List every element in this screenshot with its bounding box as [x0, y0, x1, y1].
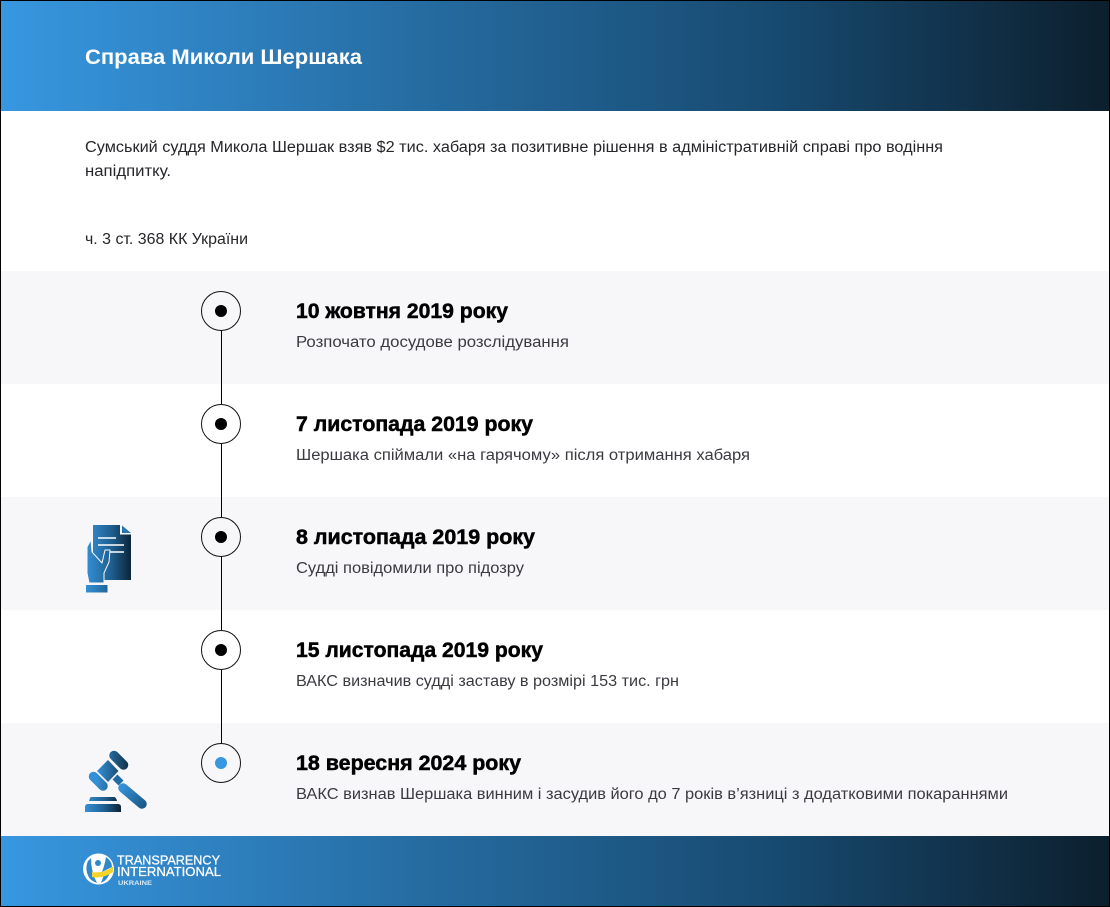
- logo: Transparency International Ukraine: INTERNATIONAL: [117, 865, 221, 879]
- timeline event 4: ВАКС визначив судді заставу в розмірі 153 тис. грн: [296, 673, 679, 690]
- icon: judge gavel: [85, 756, 142, 812]
- timeline event 3: 8 листопада 2019 року: [296, 526, 535, 549]
- footer banner: [1, 836, 1109, 906]
- icon: hand holding document: [86, 525, 131, 592]
- timeline event 2: Шершака спіймали «на гарячому» після отримання хабаря: [296, 447, 750, 464]
- logo: Transparency International Ukraine: TRANSPARENCY: [117, 854, 221, 868]
- intro text: [85, 139, 943, 180]
- legal article: ч. 3 ст. 368 КК України: [85, 231, 248, 248]
- timeline event 4: 15 листопада 2019 року: [296, 639, 543, 662]
- timeline event 1: 10 жовтня 2019 року: [296, 300, 508, 323]
- timeline event 1: [202, 292, 569, 351]
- timeline connector line: [220, 311, 222, 763]
- intro text: напідпитку.: [85, 163, 171, 180]
- header banner: [1, 1, 1109, 111]
- timeline event 3: [202, 518, 535, 577]
- timeline event 2: [202, 404, 750, 464]
- logo: Transparency International Ukraine: [83, 854, 221, 887]
- timeline event 5: 18 вересня 2024 року: [296, 752, 521, 775]
- timeline event 1: Розпочато досудове розслідування: [296, 334, 569, 351]
- timeline event 5: [202, 744, 1008, 803]
- intro text: Сумський суддя Микола Шершак взяв $2 тис. хабаря за позитивне рішення в адміністративній справі про водіння: [85, 139, 943, 156]
- title: Справа Миколи Шершака: [85, 46, 362, 69]
- timeline event 3: Судді повідомили про підозру: [296, 560, 524, 577]
- timeline event 5: ВАКС визнав Шершака винним і засудив його до 7 років в’язниці з додатковими покараннями: [296, 786, 1008, 803]
- row backgrounds: [1, 271, 1109, 836]
- timeline event 2: 7 листопада 2019 року: [296, 413, 533, 436]
- timeline event 4: [202, 630, 679, 690]
- logo: Transparency International Ukraine: UKRAINE: [118, 880, 153, 887]
